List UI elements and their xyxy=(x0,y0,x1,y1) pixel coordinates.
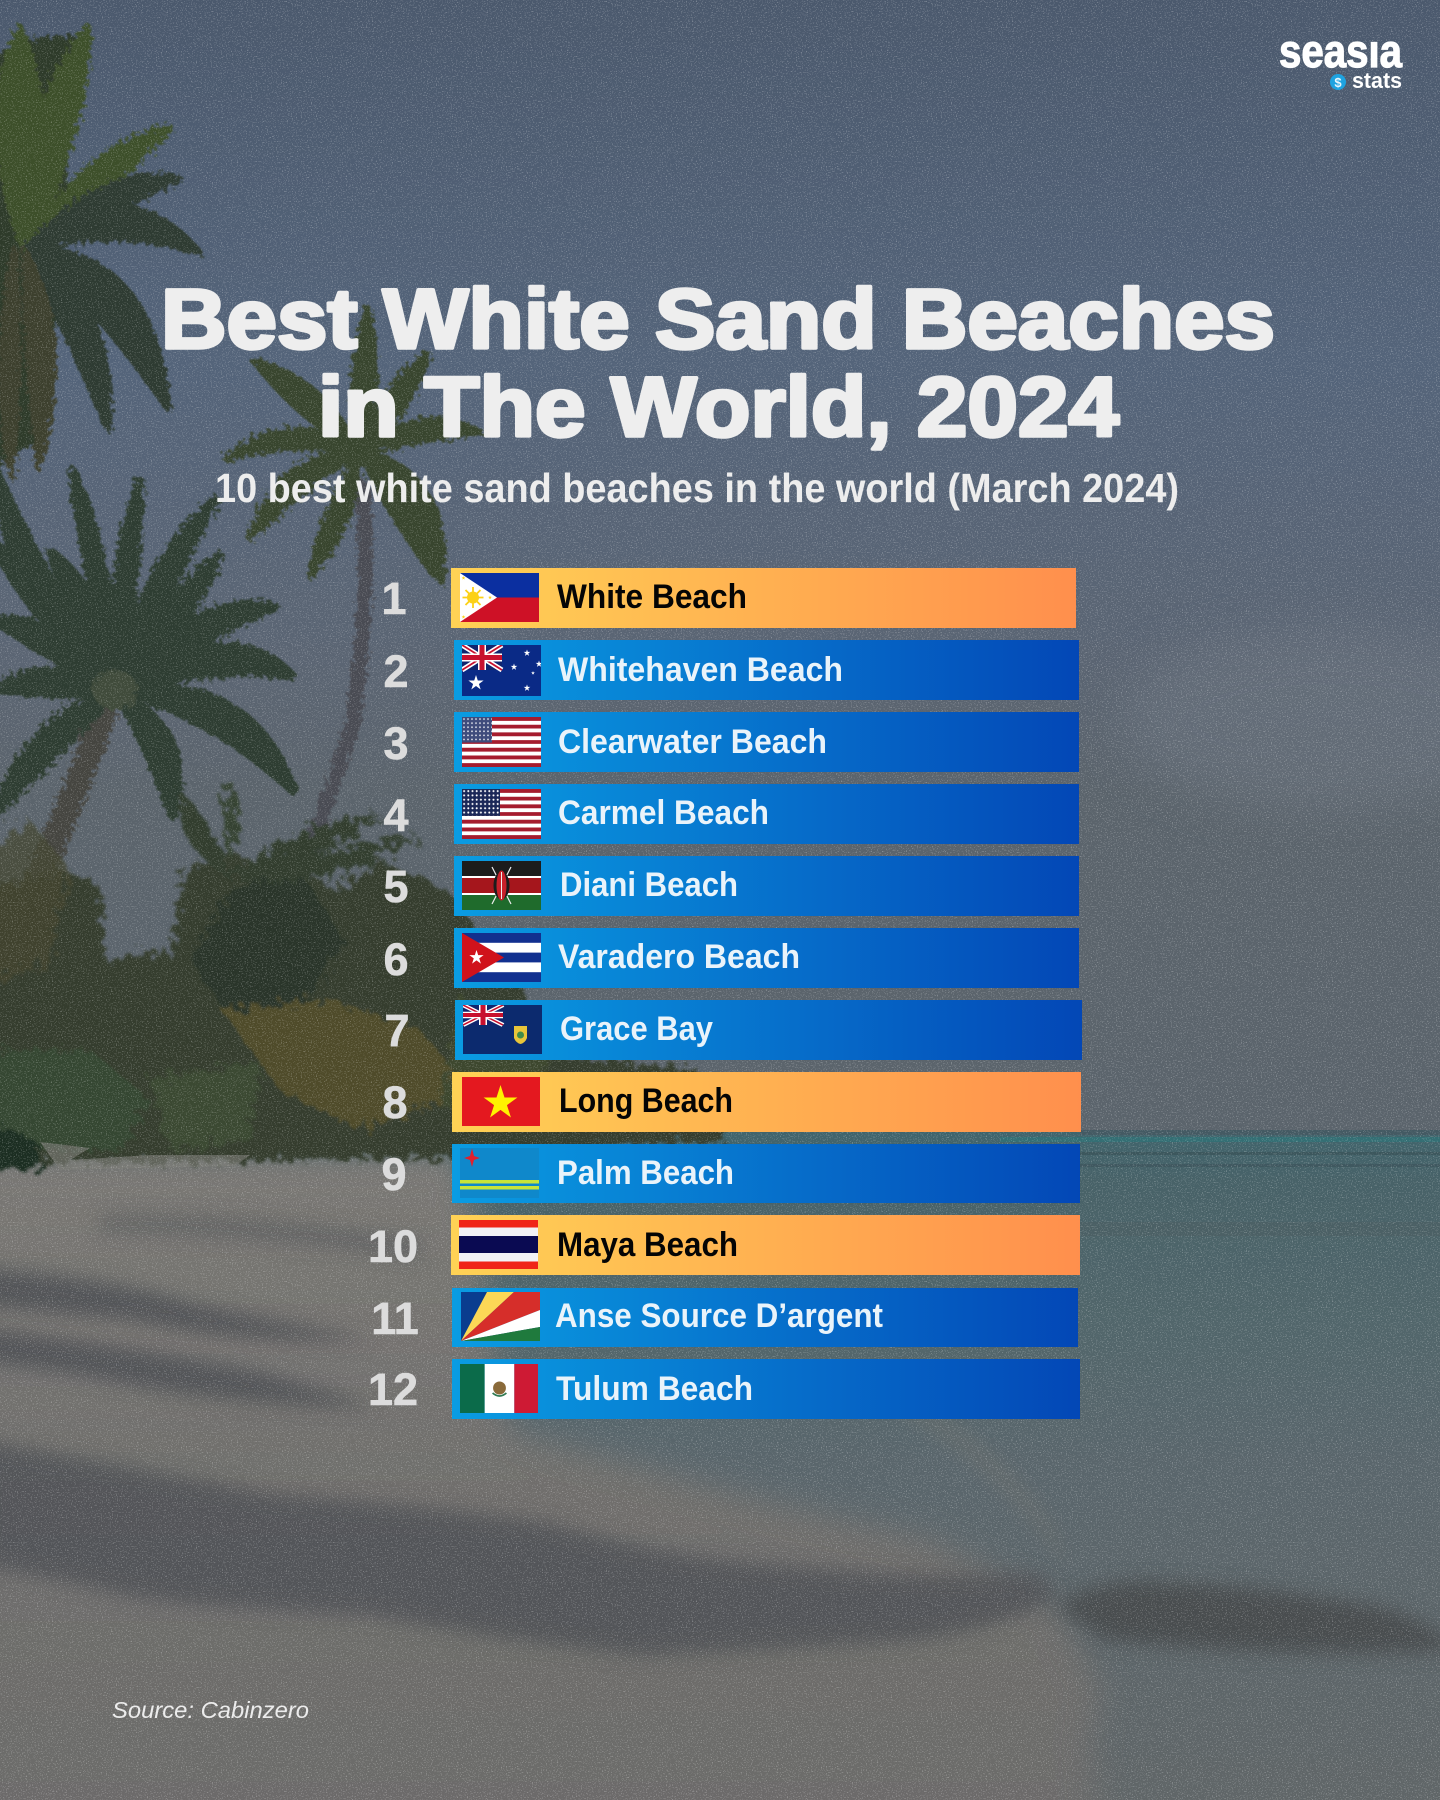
row 2: Whitehaven Beach xyxy=(383,640,1079,700)
name: Anse Source D’argent xyxy=(555,1297,883,1335)
row 6: Varadero Beach xyxy=(383,928,1079,988)
rank 9: 9 xyxy=(381,1149,407,1200)
flag: Philippines xyxy=(460,573,539,622)
rank 4: 4 xyxy=(383,790,409,841)
sand xyxy=(0,1150,1102,1800)
logo icon: $ xyxy=(1334,75,1342,90)
bar 2 xyxy=(454,640,1079,700)
flag: Cuba xyxy=(462,933,541,982)
palm shadows on the sand xyxy=(0,1214,1056,1656)
rank 6: 6 xyxy=(383,934,409,985)
rock in the shallows xyxy=(1056,1581,1440,1653)
flag: Thailand xyxy=(459,1220,538,1269)
rank 5: 5 xyxy=(383,861,409,912)
title line 1: Best White Sand Beaches xyxy=(161,272,1275,366)
row 4: Carmel Beach xyxy=(383,784,1079,844)
name: Grace Bay xyxy=(560,1010,713,1048)
rank 3: 3 xyxy=(383,718,409,769)
bar 7 xyxy=(455,1000,1082,1060)
flag: Aruba xyxy=(460,1148,539,1198)
name: Maya Beach xyxy=(557,1226,738,1264)
bar 9 xyxy=(452,1144,1080,1203)
logo sub-word: stats xyxy=(1352,68,1402,93)
bar 3 xyxy=(454,712,1079,772)
rank 11: 11 xyxy=(371,1293,419,1344)
lower fronds xyxy=(25,176,198,428)
flag: United States xyxy=(462,717,541,767)
title xyxy=(161,272,1275,454)
flag: Turks and Caicos xyxy=(463,1005,542,1054)
name: Carmel Beach xyxy=(558,794,769,832)
bar 11 xyxy=(452,1288,1078,1347)
flag: Kenya xyxy=(462,861,541,910)
flag: Mexico xyxy=(460,1364,538,1413)
row 9: Palm Beach xyxy=(381,1144,1080,1203)
hanging fronds xyxy=(2,250,54,478)
trunk xyxy=(233,480,365,1085)
bar 10 xyxy=(451,1215,1080,1275)
row 5: Diani Beach xyxy=(383,856,1079,916)
row 11: Anse Source D'argent xyxy=(371,1288,1078,1347)
undergrowth xyxy=(0,780,725,1170)
bar 6 xyxy=(454,928,1079,988)
bar 1 xyxy=(451,568,1076,628)
sky xyxy=(0,0,1440,1200)
name: Varadero Beach xyxy=(558,938,800,976)
trunk xyxy=(0,700,108,970)
title line 2: in The World, 2024 xyxy=(318,360,1119,454)
rank 8: 8 xyxy=(382,1077,408,1128)
bar 4 xyxy=(454,784,1079,844)
flag: Australia xyxy=(462,645,541,696)
palm: top left xyxy=(0,28,198,480)
name: Whitehaven Beach xyxy=(558,651,843,689)
name: Clearwater Beach xyxy=(558,723,827,761)
row 1: White Beach xyxy=(381,568,1076,628)
name: Long Beach xyxy=(559,1082,733,1120)
row 3: Clearwater Beach xyxy=(383,712,1079,772)
name: Palm Beach xyxy=(557,1154,734,1192)
crown fronds xyxy=(226,308,480,582)
row 8: Long Beach xyxy=(382,1072,1081,1132)
foam streak xyxy=(880,1390,1069,1575)
subtitle: 10 best white sand beaches in the world (March 2024) xyxy=(215,465,1179,511)
source note: Source: Cabinzero xyxy=(112,1697,309,1723)
ranking list xyxy=(368,568,1082,1419)
palm: left middle xyxy=(0,470,293,970)
rank 12: 12 xyxy=(368,1364,418,1415)
row 12: Tulum Beach xyxy=(368,1359,1080,1419)
row 7: Grace Bay xyxy=(384,1000,1082,1060)
name: White Beach xyxy=(557,578,747,616)
name: Diani Beach xyxy=(560,866,738,904)
rank 1: 1 xyxy=(381,573,407,624)
crown highlight xyxy=(93,670,137,710)
rank 7: 7 xyxy=(384,1005,410,1056)
bar 8 xyxy=(452,1072,1081,1132)
row 10: Maya Beach xyxy=(368,1215,1080,1275)
name: Tulum Beach xyxy=(556,1370,753,1408)
crown fronds xyxy=(0,470,293,815)
rank 10: 10 xyxy=(368,1221,418,1272)
crown mass xyxy=(0,36,90,480)
logo wordmark: seasia xyxy=(1279,25,1402,77)
flag: United States xyxy=(462,789,541,839)
rank 2: 2 xyxy=(383,646,409,697)
palm: centre with curved trunk xyxy=(226,308,480,1085)
flag: Seychelles xyxy=(461,1292,540,1341)
sea xyxy=(0,1130,1440,1800)
bar 5 xyxy=(454,856,1079,916)
driftwood xyxy=(40,1142,250,1170)
bar 12 xyxy=(452,1359,1080,1419)
upper fronds xyxy=(0,28,170,250)
logo: seasia stats xyxy=(1280,41,1403,90)
flag: Vietnam xyxy=(462,1077,540,1126)
cloud glow xyxy=(1120,630,1440,810)
